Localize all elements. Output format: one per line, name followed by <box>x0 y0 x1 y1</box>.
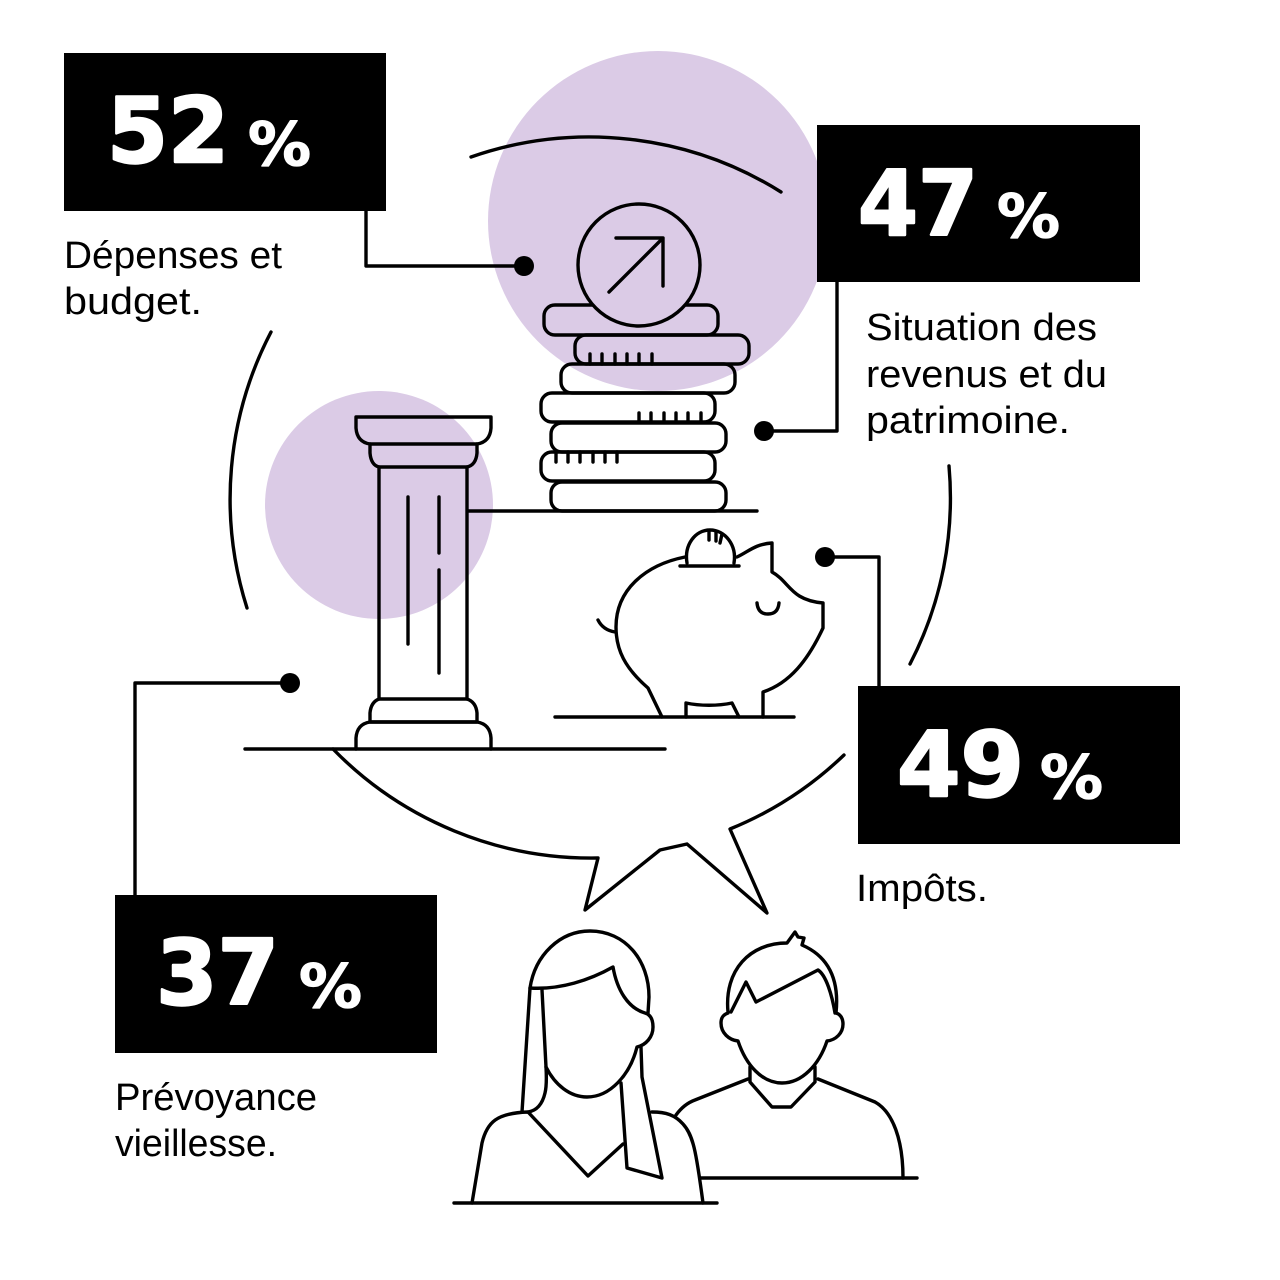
stat box: 49 % <box>858 686 1180 844</box>
icon: piggy bank <box>555 530 823 717</box>
stat box: 47 %: 47 <box>858 152 978 257</box>
label: Impôts: Impôts. <box>856 868 988 910</box>
connector: 37 % <box>135 673 300 895</box>
connector: 52 % <box>366 210 534 276</box>
connector: 47 % <box>754 282 837 441</box>
label: Dépenses et budget: Dépenses et <box>64 235 282 277</box>
icon: two people <box>454 931 917 1203</box>
label: Dépenses et budget: budget. <box>64 281 202 323</box>
stat box: 37 % <box>115 895 437 1053</box>
label: Prévoyance vieillesse: Prévoyance <box>115 1077 317 1119</box>
label: Situation des revenus et du patrimoine <box>866 307 1107 442</box>
stat box: 49 %: 49 <box>897 713 1024 818</box>
label: Situation des revenus et du patrimoine: revenus et du <box>866 354 1107 396</box>
icon: woman <box>454 931 717 1203</box>
label: Situation des revenus et du patrimoine: Situation des <box>866 307 1097 349</box>
stat box: 52 % <box>64 53 386 211</box>
purple circle behind column <box>265 391 493 619</box>
icon: greek column <box>245 417 665 749</box>
stat box: 37 %: % <box>299 952 362 1022</box>
label: Dépenses et budget <box>64 235 282 323</box>
connector: 49 % <box>815 547 879 686</box>
stat box: 47 %: % <box>997 182 1060 252</box>
icon: man <box>676 932 917 1178</box>
label: Situation des revenus et du patrimoine: patrimoine. <box>866 400 1070 442</box>
stat box: 47 % <box>817 125 1140 282</box>
icon: stack of coins with arrow coin <box>468 204 757 511</box>
stat box: 37 %: 37 <box>156 921 279 1026</box>
stat box: 52 %: 52 <box>107 79 229 184</box>
surrounding thought-bubble outline <box>230 137 950 913</box>
stat box: 52 %: % <box>248 110 311 180</box>
label: Prévoyance vieillesse: vieillesse. <box>115 1123 277 1165</box>
label: Prévoyance vieillesse <box>115 1077 317 1165</box>
purple circle behind coins <box>488 51 828 391</box>
stat box: 49 %: % <box>1040 743 1103 813</box>
